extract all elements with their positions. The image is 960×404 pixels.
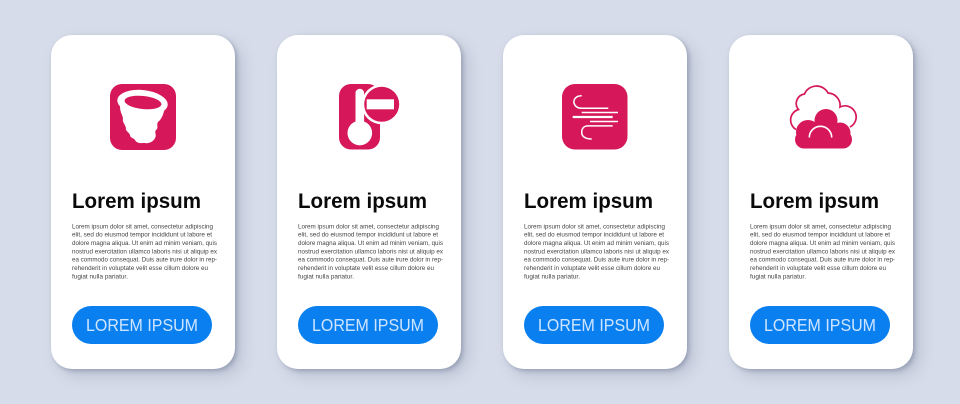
text block: rehenderit in voluptate velit esse cillum dolore eu <box>750 265 886 272</box>
text block: elit, sed do eiusmod tempor incididunt ut labore et <box>298 232 438 239</box>
text block: fugiat nulla pariatur. <box>298 273 354 280</box>
text block: ea commodo consequat. Duis aute irure dolor in rep- <box>524 257 669 264</box>
panel: cloud card <box>729 35 913 369</box>
heading: Lorem ipsum <box>72 189 201 213</box>
text block <box>750 223 896 280</box>
text block: nostrud exercitation ullamco laboris nisi ut aliquip ex <box>72 248 218 255</box>
text block: nostrud exercitation ullamco laboris nisi ut aliquip ex <box>750 248 896 255</box>
panel: thermometer card <box>277 35 461 369</box>
icon: wind <box>562 84 628 150</box>
button <box>750 306 890 344</box>
text block: fugiat nulla pariatur. <box>750 273 806 280</box>
text block: Lorem ipsum dolor sit amet, consectetur adipiscing <box>524 223 665 230</box>
text block: ea commodo consequat. Duis aute irure dolor in rep- <box>750 257 895 264</box>
text block: rehenderit in voluptate velit esse cillum dolore eu <box>524 265 660 272</box>
text block: Lorem ipsum dolor sit amet, consectetur adipiscing <box>298 223 439 230</box>
text block: elit, sed do eiusmod tempor incididunt ut labore et <box>72 232 212 239</box>
heading: Lorem ipsum <box>298 189 427 213</box>
text block: dolore magna aliqua. Ut enim ad minim veniam, quis <box>750 240 896 247</box>
text block: elit, sed do eiusmod tempor incididunt ut labore et <box>524 232 664 239</box>
button: LOREM IPSUM <box>312 315 424 335</box>
text block <box>72 223 218 280</box>
panel: wind card <box>503 35 687 369</box>
text block: nostrud exercitation ullamco laboris nisi ut aliquip ex <box>524 248 670 255</box>
text block <box>298 223 444 280</box>
heading: Lorem ipsum <box>524 189 653 213</box>
button <box>298 306 438 344</box>
text block: fugiat nulla pariatur. <box>524 273 580 280</box>
text block <box>524 223 670 280</box>
text block: dolore magna aliqua. Ut enim ad minim veniam, quis <box>72 240 218 247</box>
button: LOREM IPSUM <box>538 315 650 335</box>
text block: Lorem ipsum dolor sit amet, consectetur adipiscing <box>72 223 213 230</box>
text block: elit, sed do eiusmod tempor incididunt ut labore et <box>750 232 890 239</box>
text block: dolore magna aliqua. Ut enim ad minim veniam, quis <box>298 240 444 247</box>
panel: tornado card <box>51 35 235 369</box>
text block: rehenderit in voluptate velit esse cillum dolore eu <box>298 265 434 272</box>
heading: Lorem ipsum <box>750 189 879 213</box>
icon: thermometer with minus <box>339 84 402 150</box>
text block: ea commodo consequat. Duis aute irure dolor in rep- <box>72 257 217 264</box>
text block: fugiat nulla pariatur. <box>72 273 128 280</box>
text block: dolore magna aliqua. Ut enim ad minim veniam, quis <box>524 240 670 247</box>
text block: rehenderit in voluptate velit esse cillum dolore eu <box>72 265 208 272</box>
icon: tornado <box>110 84 176 150</box>
button <box>72 306 212 344</box>
icon: clouds <box>791 86 856 148</box>
button: LOREM IPSUM <box>764 315 876 335</box>
button: LOREM IPSUM <box>86 315 198 335</box>
button <box>524 306 664 344</box>
text block: ea commodo consequat. Duis aute irure dolor in rep- <box>298 257 443 264</box>
text block: Lorem ipsum dolor sit amet, consectetur adipiscing <box>750 223 891 230</box>
text block: nostrud exercitation ullamco laboris nisi ut aliquip ex <box>298 248 444 255</box>
